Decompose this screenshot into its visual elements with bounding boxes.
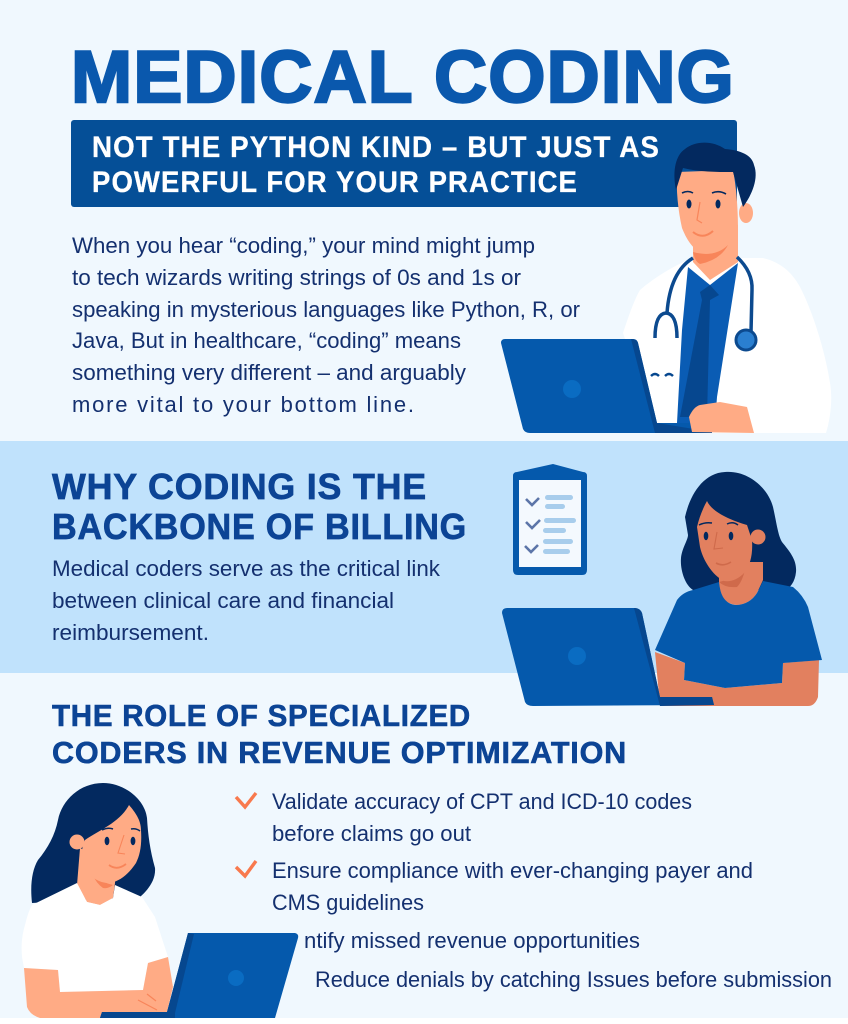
bullet: validate accuracy bbox=[272, 789, 692, 846]
bullet: identify missed revenue: ntify missed revenue opportunities bbox=[304, 928, 640, 953]
title: MEDICAL CODING bbox=[71, 37, 735, 118]
bullet: validate accuracy: Validate accuracy of CPT and ICD-10 codes bbox=[272, 789, 692, 814]
intro text block bbox=[72, 233, 580, 417]
illustration: doctor with laptop bbox=[501, 143, 831, 433]
checklist of coder duties bbox=[236, 789, 832, 992]
subtitle banner: NOT THE PYTHON KIND – BUT JUST AS bbox=[92, 131, 660, 164]
section heading: role of specialized coders: CODERS IN REVENUE OPTIMIZATION bbox=[52, 735, 627, 770]
subtitle banner bbox=[71, 120, 737, 207]
bullet: ensure compliance: Ensure compliance with ever-changing payer and bbox=[272, 858, 753, 883]
icon: orange check bbox=[236, 793, 256, 807]
intro text block: to tech wizards writing strings of 0s and 1s or bbox=[72, 265, 521, 290]
icon: orange check bbox=[236, 861, 256, 876]
why coding text block: Medical coders serve as the critical link bbox=[52, 556, 441, 581]
why coding text block: reimbursement. bbox=[52, 620, 209, 645]
section heading: why coding: WHY CODING IS THE bbox=[52, 466, 427, 507]
icon: clipboard checklist bbox=[513, 464, 587, 575]
section heading: role of specialized coders bbox=[52, 698, 627, 770]
bullet: ensure compliance bbox=[272, 858, 753, 915]
intro text block: When you hear “coding,” your mind might jump bbox=[72, 233, 535, 258]
why coding text block: between clinical care and financial bbox=[52, 588, 394, 613]
bullet: validate accuracy: before claims go out bbox=[272, 821, 471, 846]
subtitle banner: POWERFUL FOR YOUR PRACTICE bbox=[92, 166, 578, 199]
bullet: ensure compliance: CMS guidelines bbox=[272, 890, 424, 915]
intro text block: more vital to your bottom line. bbox=[72, 392, 414, 417]
why coding text block bbox=[52, 556, 441, 645]
section heading: role of specialized coders: THE ROLE OF SPECIALIZED bbox=[52, 698, 471, 733]
intro text block: something very different – and arguably bbox=[72, 360, 466, 385]
intro text block: Java, But in healthcare, “coding” means bbox=[72, 328, 461, 353]
bullet: reduce denials: Reduce denials by catching Issues before submission bbox=[315, 967, 832, 992]
section heading: why coding bbox=[52, 466, 467, 547]
illustration: coder in white shirt bbox=[22, 783, 298, 1018]
illustration: coder in blue shirt bbox=[502, 472, 822, 706]
intro text block: speaking in mysterious languages like Python, R, or bbox=[72, 297, 580, 322]
section heading: why coding: BACKBONE OF BILLING bbox=[52, 506, 467, 547]
